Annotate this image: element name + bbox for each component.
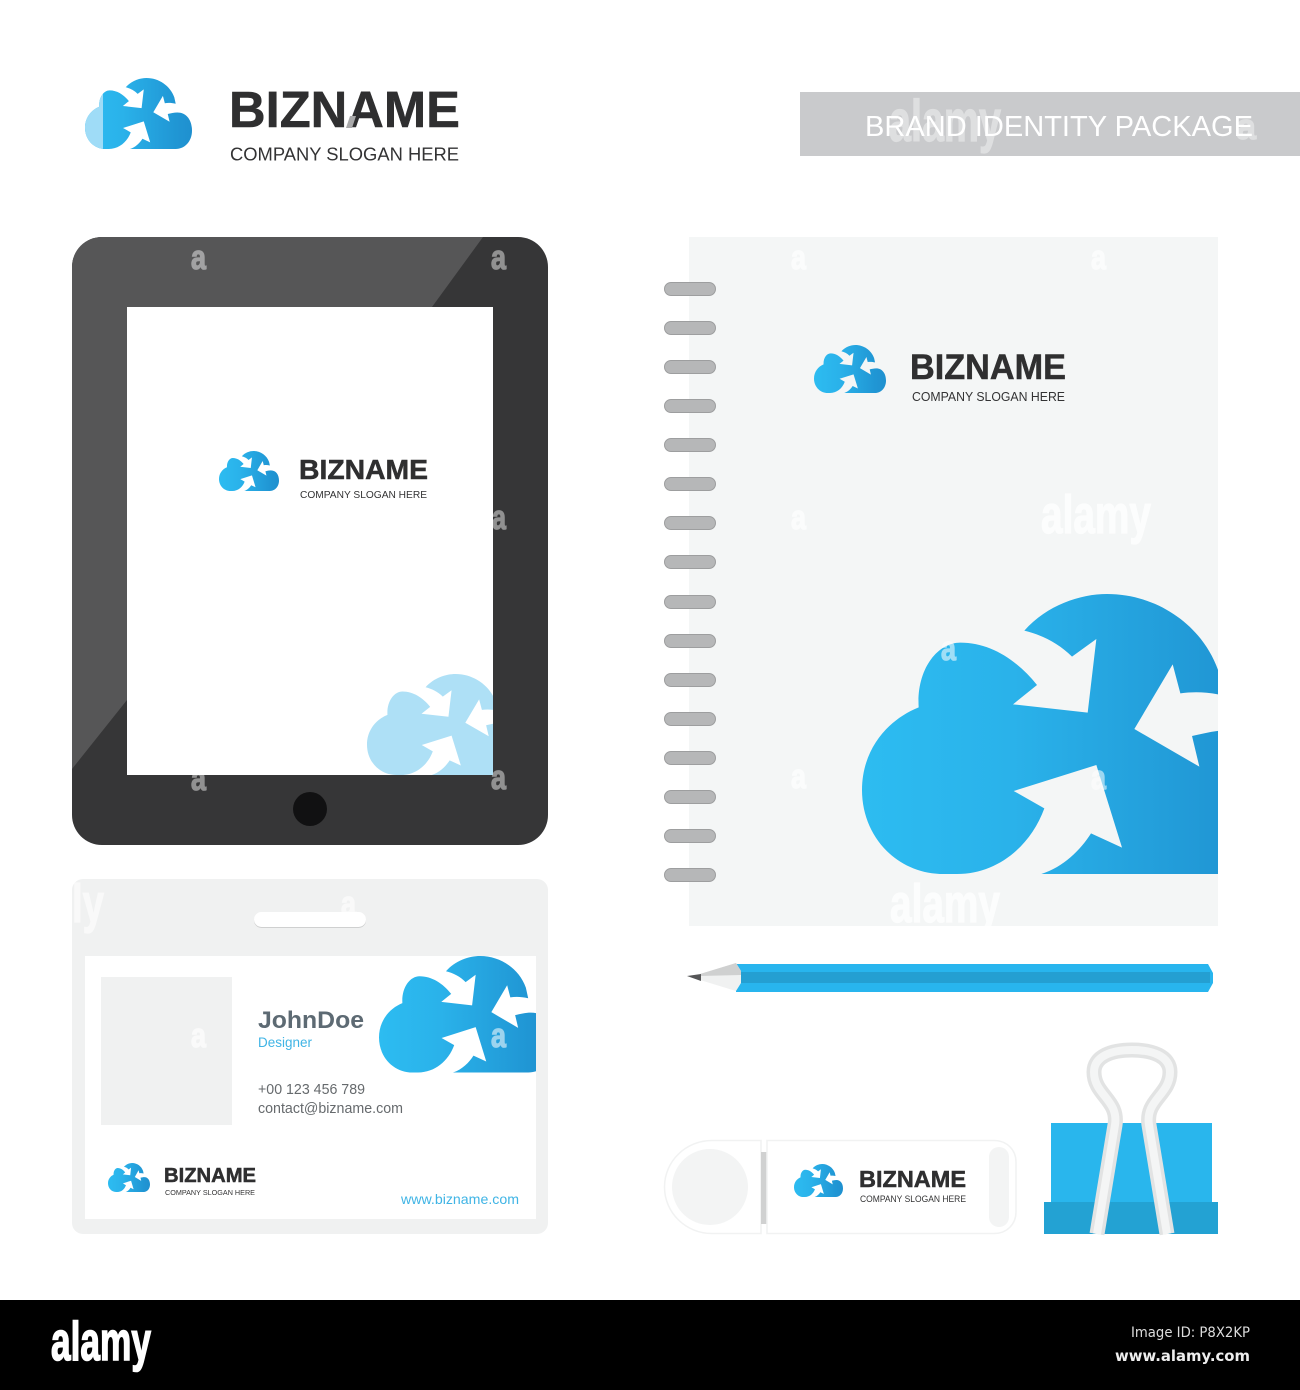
image id: Image ID: P8X2KP [1131, 1325, 1250, 1341]
banner: brand identity package: alamy [889, 89, 1001, 154]
logo name: BIZNAME [229, 81, 460, 138]
USB connector bar [761, 1152, 767, 1224]
tablet glare [72, 237, 483, 769]
panel: notebook: a [791, 239, 807, 277]
USB cap [664, 1140, 761, 1234]
panel: tablet: a [491, 759, 507, 797]
binder clip [1044, 1050, 1218, 1234]
phone: +00 123 456 789 [258, 1082, 365, 1098]
footer bar [0, 1300, 1300, 1390]
panel: tablet: a [491, 239, 507, 277]
tablet logo: COMPANY SLOGAN HERE [300, 489, 427, 501]
job title: Designer [258, 1034, 312, 1050]
USB logo: BIZNAME [859, 1166, 966, 1192]
USB logo [794, 1164, 966, 1204]
name: JohnDoe [258, 1007, 364, 1034]
pencil [687, 963, 1213, 992]
photo placeholder [101, 977, 232, 1125]
notebook cloud graphic: a [1091, 759, 1107, 797]
clip wire [1094, 1050, 1170, 1234]
panel: ID card holder [72, 874, 555, 1234]
card cloud graphic [379, 956, 536, 1072]
banner text: BRAND IDENTITY PACKAGE [865, 111, 1253, 143]
notebook logo: COMPANY SLOGAN HERE [912, 390, 1065, 404]
business card [85, 956, 536, 1219]
notebook logo [814, 345, 1066, 404]
tablet home button [293, 792, 327, 826]
card logo [108, 1163, 256, 1197]
tablet logo [219, 451, 428, 501]
panel: notebook: alamy [1041, 485, 1151, 545]
tablet logo: BIZNAME [299, 454, 428, 485]
card logo: BIZNAME [164, 1165, 256, 1187]
panel: tablet: a [191, 239, 207, 277]
logo slogan: COMPANY SLOGAN HERE [230, 144, 459, 164]
tablet screen [127, 307, 493, 775]
card logo: COMPANY SLOGAN HERE [165, 1188, 255, 1197]
panel: ID card holder: a [191, 1017, 207, 1055]
website: www.bizname.com [400, 1191, 519, 1207]
panel: notebook: a [1091, 239, 1107, 277]
panel: notebook [664, 237, 1218, 926]
USB drive [664, 1140, 1016, 1234]
banner: brand identity package: a [1236, 106, 1257, 147]
email: contact@bizname.com [258, 1101, 403, 1117]
banner: brand identity package [800, 89, 1300, 156]
panel: notebook: alamy [890, 874, 1000, 934]
website: www.alamy.com [1115, 1347, 1250, 1365]
panel: notebook: a [791, 758, 807, 796]
panel: tablet: a [191, 760, 207, 798]
panel: tablet: a [492, 499, 507, 537]
alamy logo: alamy [51, 1310, 151, 1372]
panel: notebook: a [791, 499, 807, 537]
panel: tablet [72, 237, 548, 845]
card cloud graphic: a [491, 1017, 507, 1055]
notebook cloud graphic [862, 594, 1218, 874]
USB logo: COMPANY SLOGAN HERE [860, 1194, 966, 1204]
notebook logo: BIZNAME [910, 348, 1066, 387]
lanyard slot [254, 912, 366, 928]
tablet pale cloud [367, 674, 493, 775]
main logo [85, 78, 460, 164]
panel: ID card holder: a [341, 885, 357, 923]
icon: cloud with arrows [85, 78, 192, 149]
USB body [767, 1140, 1016, 1234]
spiral binding [664, 282, 716, 882]
notebook cloud graphic: a [941, 630, 957, 668]
panel: ID card holder: ly [72, 874, 104, 934]
